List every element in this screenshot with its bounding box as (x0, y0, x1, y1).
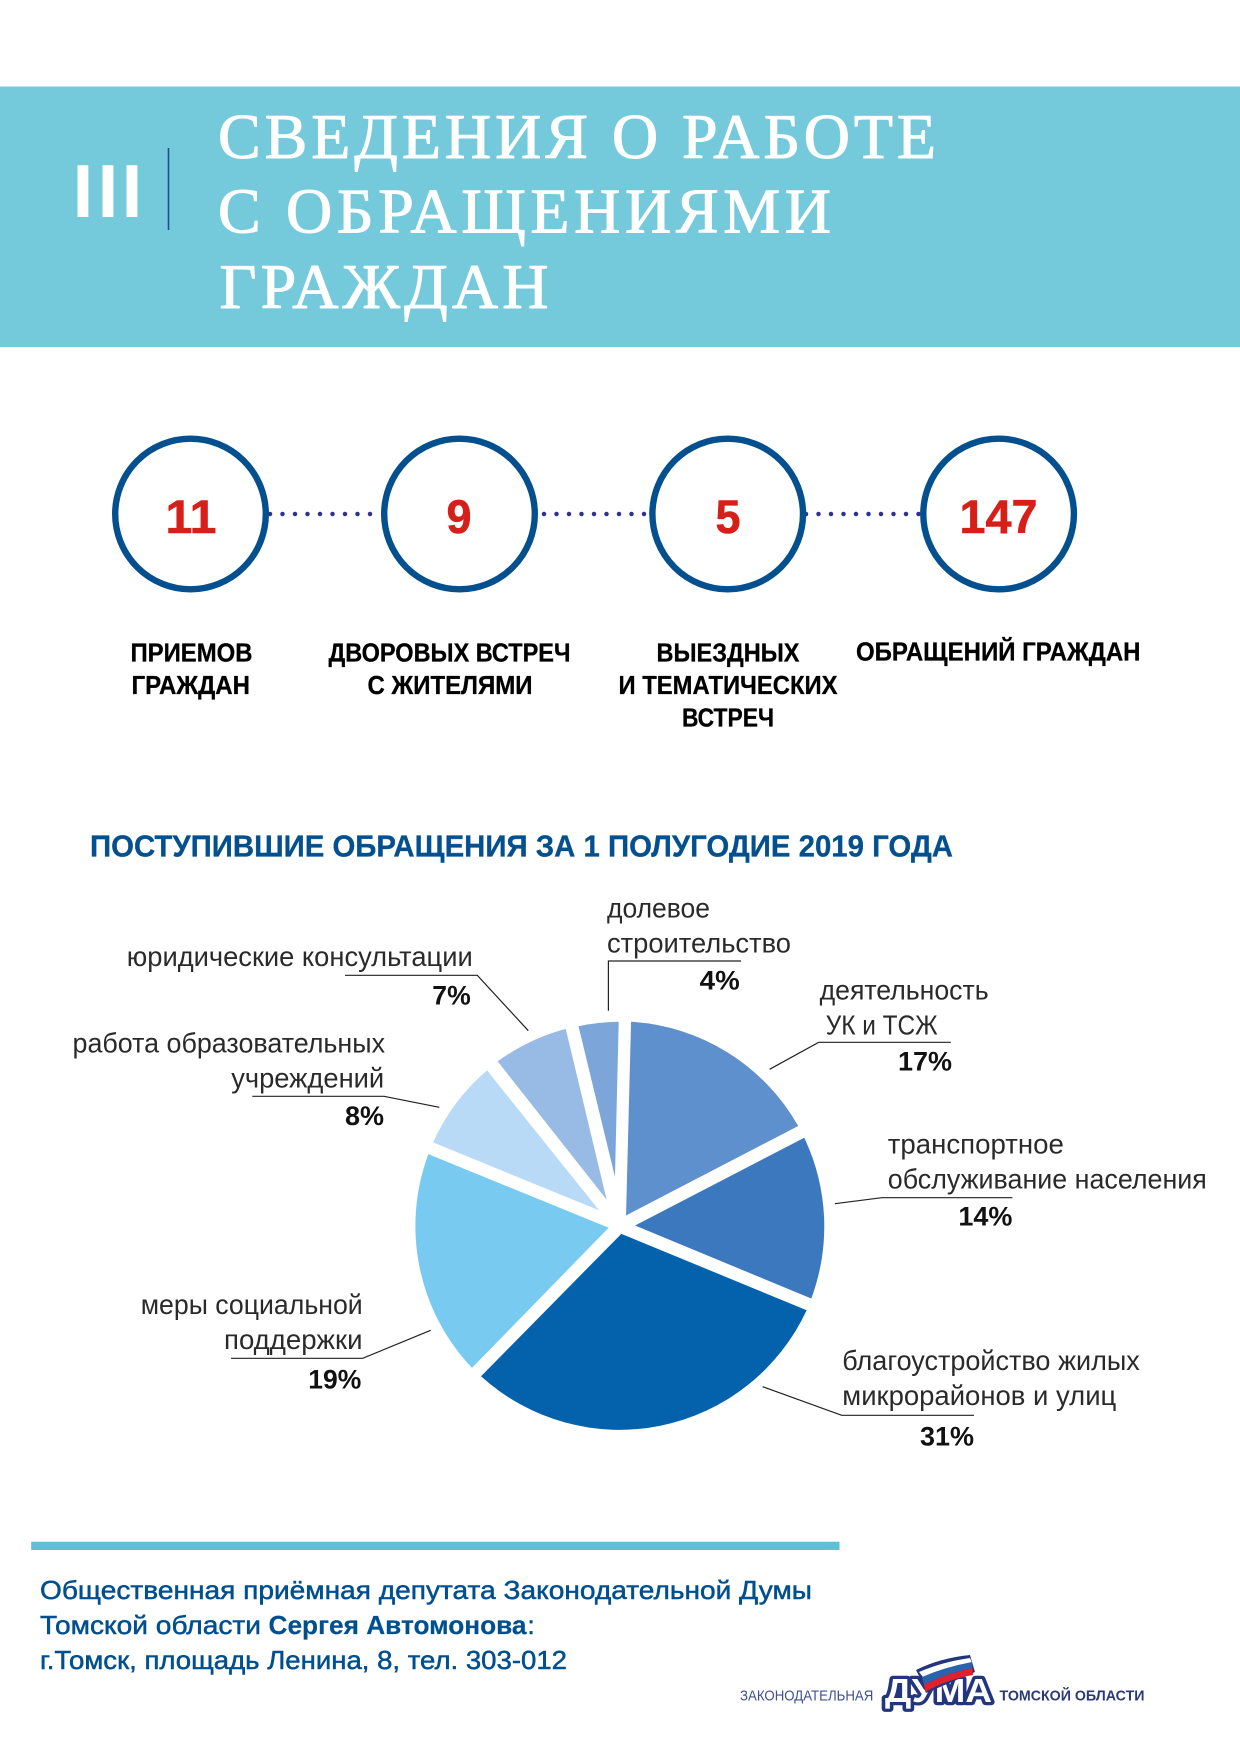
footer contact text: Сергея Автомонова (268, 1610, 527, 1640)
label: деятельность УК и ТСЖ 17% (770, 974, 989, 1077)
label: транспортное обслуживание населения 14%: транспортное (888, 1128, 1064, 1159)
title: С ОБРАЩЕНИЯМИ (218, 176, 831, 246)
label: меры социальной поддержки 19%: 19% (308, 1364, 361, 1394)
slice: 17% (626, 1022, 798, 1215)
section number: I (72, 149, 93, 233)
label: благоустройство жилых микрорайонов и улиц 31%: микрорайонов и улиц (842, 1380, 1116, 1411)
slice: 31% (481, 1234, 807, 1430)
label: благоустройство жилых микрорайонов и улиц 31% (763, 1345, 1140, 1452)
stat: 147 обращений граждан (856, 439, 1140, 667)
label: юридические консультации 7% (127, 941, 528, 1031)
label: транспортное обслуживание населения 14%: 14% (958, 1202, 1012, 1232)
label: деятельность УК и ТСЖ 17%: УК и ТСЖ (826, 1009, 938, 1040)
stat: 11 приемов граждан: ГРАЖДАН (132, 672, 250, 700)
label: долевое строительство 4%: 4% (700, 965, 740, 995)
label: меры социальной поддержки 19%: меры социальной (141, 1289, 363, 1320)
stat: 9 дворовых встреч: С ЖИТЕЛЯМИ (368, 672, 532, 700)
logo: Законодательная Дума Томской области: ЗАКОНОДАТЕЛЬНАЯ (740, 1688, 873, 1705)
stat: 147 обращений граждан: ОБРАЩЕНИЙ ГРАЖДАН (856, 637, 1140, 667)
stat: 5 выездных и тематических встреч: 5 (716, 490, 740, 543)
slice: 7% (498, 1029, 607, 1200)
label: транспортное обслуживание населения 14% (835, 1128, 1207, 1232)
stat: 9 дворовых встреч (328, 439, 570, 700)
label: работа образовательных учреждений 8%: работа образовательных (72, 1028, 385, 1059)
chart heading: ПОСТУПИВШИЕ ОБРАЩЕНИЯ ЗА 1 ПОЛУГОДИЕ 2019 ГОДА (90, 830, 953, 864)
label: работа образовательных учреждений 8% (72, 1028, 439, 1131)
stat: 11 приемов граждан: ПРИЕМОВ (130, 640, 252, 668)
slice: 19% (415, 1154, 609, 1368)
title: СВЕДЕНИЯ О РАБОТЕ (218, 101, 936, 172)
footer contact text (40, 1575, 812, 1675)
dotted connectors between circles (270, 512, 920, 516)
stat: 11 приемов граждан: 11 (166, 490, 216, 543)
label: транспортное обслуживание населения 14%: обслуживание населения (888, 1163, 1207, 1194)
stat: 5 выездных и тематических встреч: И ТЕМАТИЧЕСКИХ (618, 672, 838, 700)
stat: 147 обращений граждан: 147 (960, 490, 1038, 543)
label: юридические консультации 7%: юридические консультации (127, 941, 473, 972)
footer contact text: : (528, 1610, 535, 1640)
label: благоустройство жилых микрорайонов и улиц 31%: благоустройство жилых (842, 1345, 1140, 1376)
label: долевое строительство 4%: долевое (607, 892, 710, 923)
footer contact text: Общественная приёмная депутата Законодательной Думы (40, 1575, 812, 1605)
section number: I (98, 149, 118, 233)
title: ГРАЖДАН (220, 251, 548, 322)
logo wordmark: ДУМА (885, 1672, 992, 1709)
stat: 5 выездных и тематических встреч: ВЫЕЗДНЫХ (656, 640, 800, 668)
section number: I (122, 149, 142, 233)
label: деятельность УК и ТСЖ 17%: 17% (898, 1047, 952, 1077)
label: работа образовательных учреждений 8%: 8% (345, 1101, 384, 1131)
stat: 5 выездных и тематических встреч: ВСТРЕЧ (682, 705, 774, 733)
title (218, 101, 936, 322)
label: долевое строительство 4%: строительство (607, 927, 791, 958)
header banner (0, 86, 1240, 347)
stat: 5 выездных и тематических встреч (618, 439, 838, 733)
slice: 14% (635, 1138, 824, 1299)
logo: Законодательная Дума Томской области: ТОМСКОЙ ОБЛАСТИ (1000, 1687, 1144, 1705)
footer contact text: Томской области (40, 1610, 261, 1640)
label: меры социальной поддержки 19% (141, 1289, 431, 1394)
logo flag swoosh (916, 1655, 975, 1693)
label: работа образовательных учреждений 8%: учреждений (231, 1062, 384, 1093)
footer divider bar (31, 1542, 839, 1550)
footer contact text: г.Томск, площадь Ленина, 8, тел. 303-012 (40, 1645, 567, 1675)
label: деятельность УК и ТСЖ 17%: деятельность (820, 974, 989, 1005)
slice: 4% (578, 1022, 619, 1177)
label: благоустройство жилых микрорайонов и улиц 31%: 31% (920, 1422, 974, 1452)
stat: 9 дворовых встреч: ДВОРОВЫХ ВСТРЕЧ (328, 640, 570, 668)
stat: 9 дворовых встреч: 9 (446, 490, 472, 543)
slice: 8% (433, 1070, 599, 1210)
label: юридические консультации 7%: 7% (432, 980, 471, 1010)
pie chart (415, 1022, 824, 1430)
label: меры социальной поддержки 19%: поддержки (224, 1324, 362, 1355)
label: долевое строительство 4% (607, 892, 791, 1011)
logo: Законодательная Дума Томской области (740, 1655, 1144, 1709)
stat: 11 приемов граждан (115, 439, 266, 700)
